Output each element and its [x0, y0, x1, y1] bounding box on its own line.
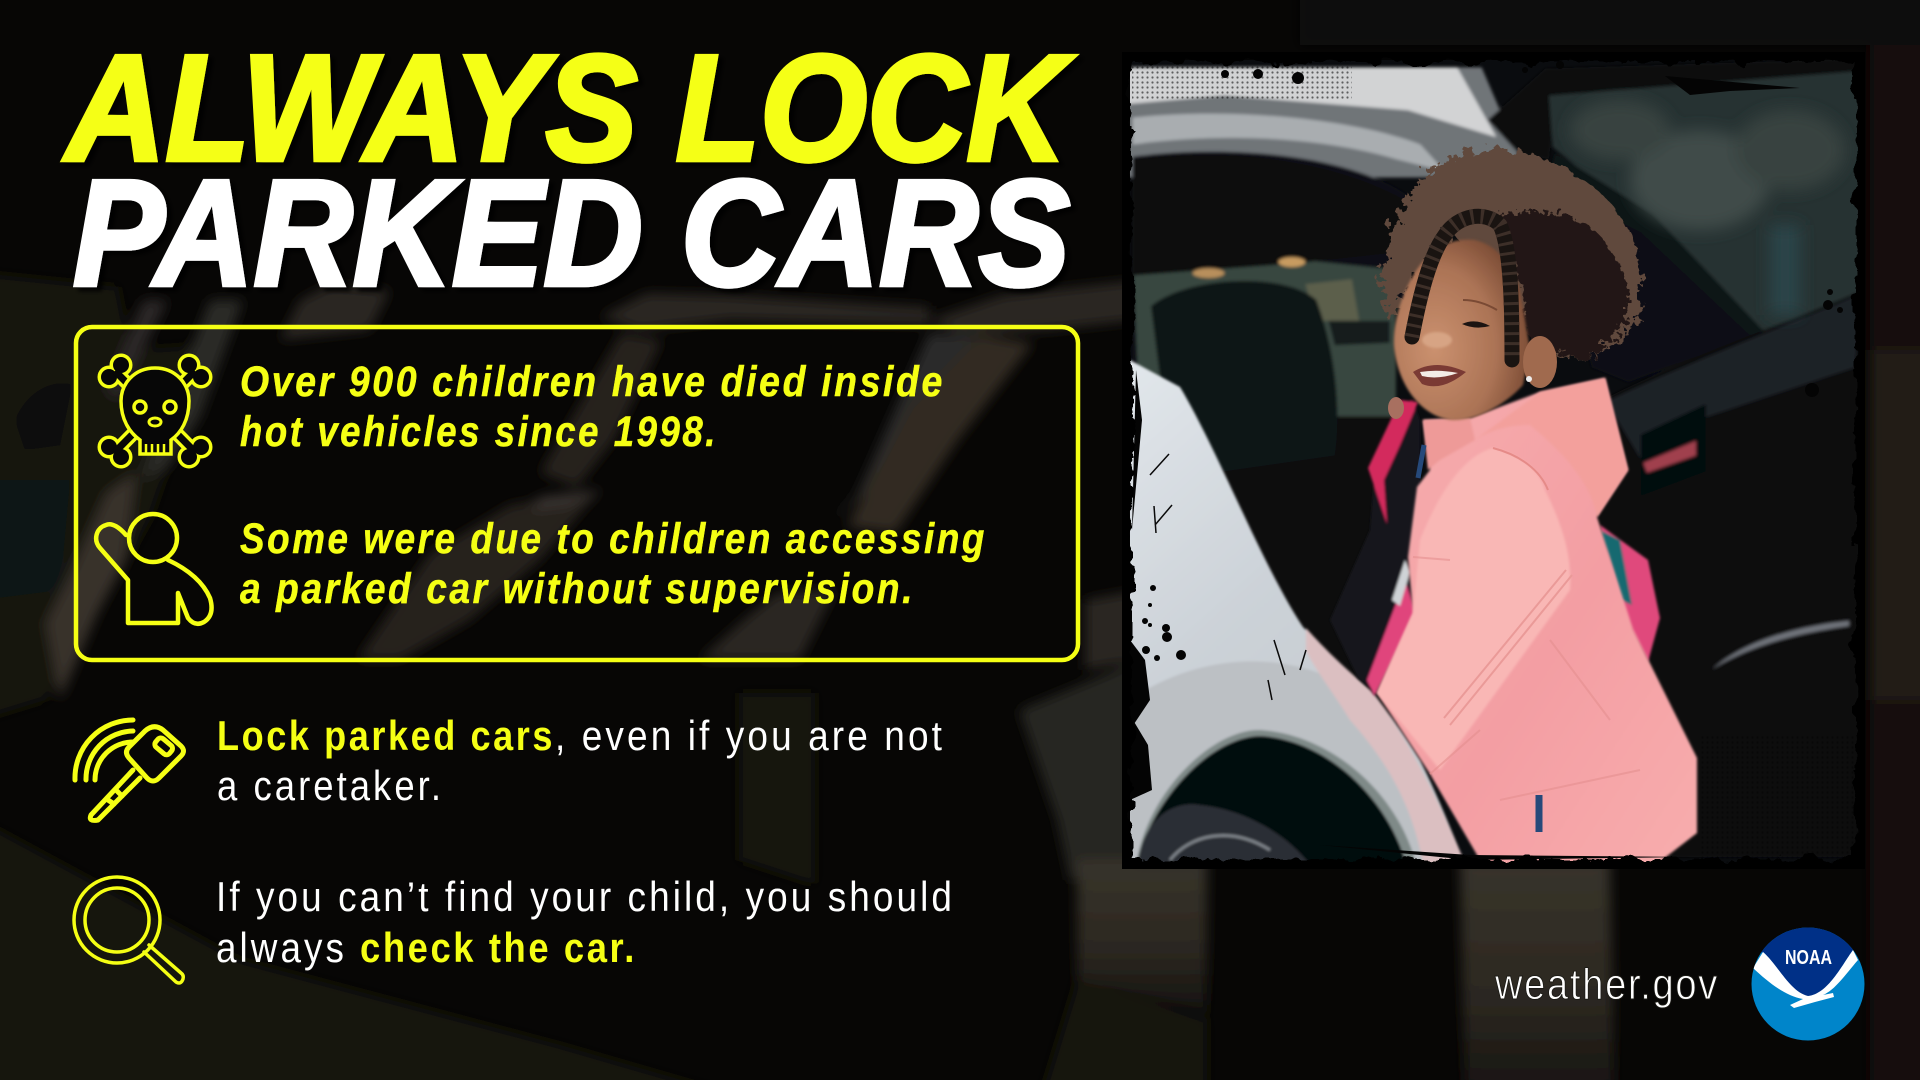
text: over 900 children	[240, 358, 945, 456]
text: some were due	[240, 515, 987, 613]
icon: magnifying glass	[74, 877, 183, 983]
text: lock parked cars: , even if you are not	[555, 712, 945, 759]
photo: child at open car door	[1122, 52, 1865, 882]
text: lock parked cars: a caretaker.	[217, 762, 444, 809]
icon: car key with signal	[75, 720, 184, 820]
title line: parked cars: PARKED CARS	[73, 148, 1070, 317]
car roof and interior	[1130, 64, 1858, 670]
icon: skull and crossbones	[98, 354, 212, 468]
logo: NOAA	[1750, 925, 1866, 1040]
blurred trees through door window	[1570, 100, 1845, 315]
panel: statistics	[76, 327, 1078, 660]
text: lock parked cars: Lock parked cars	[217, 712, 555, 759]
halftone and splatter texture	[1130, 61, 1860, 865]
title	[62, 23, 1075, 317]
text: over 900 children: Over 900 children have died inside	[240, 358, 945, 406]
text: over 900 children: hot vehicles since 1998.	[240, 408, 718, 456]
grunge photo edge	[1122, 52, 1865, 869]
girl head	[1382, 149, 1642, 420]
hand on strap	[1388, 397, 1404, 419]
text: check the car: check the car.	[360, 924, 637, 971]
logo: NOAA: NOAA	[1785, 947, 1832, 969]
text: check the car: always	[216, 924, 347, 971]
white car body	[1125, 358, 1470, 875]
text: some were due: a parked car without supervision.	[240, 565, 915, 613]
straps and backpack	[1330, 398, 1660, 696]
text: some were due: Some were due to children accessing	[240, 515, 987, 563]
website: weather.gov	[1494, 960, 1719, 1009]
text: check the car: If you can’t find your child, you should	[216, 873, 955, 920]
icon: waving child	[96, 514, 212, 624]
title line: always lock: ALWAYS LOCK	[62, 23, 1075, 192]
jacket	[1377, 378, 1697, 867]
